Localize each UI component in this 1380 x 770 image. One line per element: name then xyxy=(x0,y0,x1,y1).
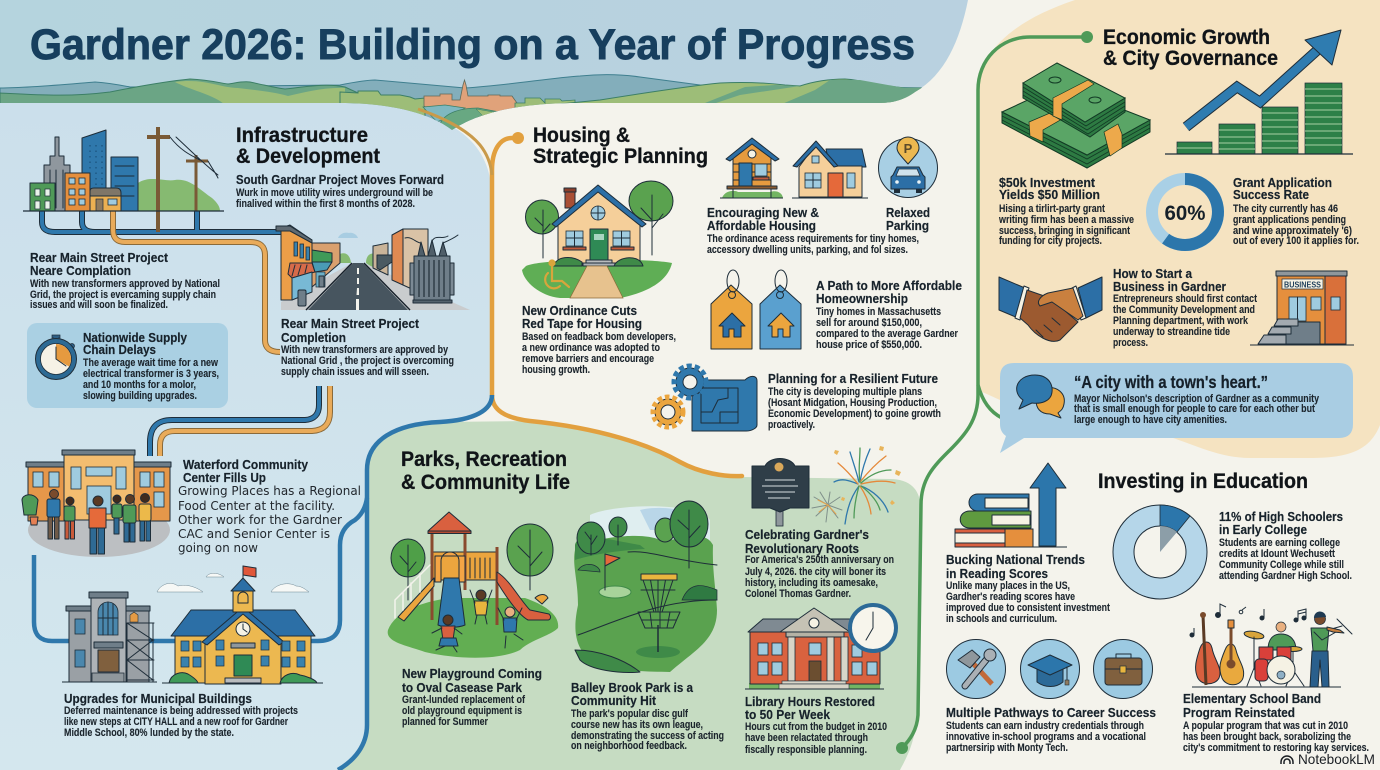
illustration: municipal buildings xyxy=(62,566,323,684)
text: encouraging new housing: Encouraging New & xyxy=(707,205,819,220)
illustration: library with clock xyxy=(745,605,896,689)
illustration: house with accessible path xyxy=(522,181,673,298)
text: bailey brook park: demonstrating the success of acting xyxy=(571,730,724,742)
connector: housing node xyxy=(512,132,524,144)
callout: mayor quote: that is small enough for people to care for each other but xyxy=(1074,403,1315,415)
icon: stopwatch xyxy=(36,335,76,380)
text: encouraging new housing: Affordable Housing xyxy=(707,218,816,233)
text: new playground: old playground equipment is xyxy=(402,705,522,717)
icon: historic plaque xyxy=(752,458,809,526)
text: new playground: to Oval Casease Park xyxy=(402,680,523,695)
text: revolutionary roots: Celebrating Gardner's xyxy=(745,527,869,542)
text: revolutionary roots: history, including its oamesake, xyxy=(745,577,878,589)
text: new ordinance: remove barriers and encourage xyxy=(522,353,654,365)
text: new ordinance: housing growth. xyxy=(522,364,590,376)
callout: supply chain delays: electrical transformer is 3 years, xyxy=(83,368,219,380)
text: reading scores: Bucking National Trends xyxy=(946,552,1085,567)
text: reading scores: in Reading Scores xyxy=(946,566,1048,581)
text: south gardner: Wurk in move utility wires underground will be xyxy=(236,187,433,199)
text: rear main street right: National Grid , the project is overcoming xyxy=(281,355,454,367)
hills and town skyline xyxy=(0,75,925,135)
text: grant application xyxy=(1233,175,1359,247)
panel: parks recreation and community life xyxy=(388,446,901,756)
text: new ordinance: a new ordinance was adopted to xyxy=(522,342,660,354)
panel: investing in education xyxy=(946,463,1369,754)
chart: 60 percent donut: 60% xyxy=(1164,202,1206,225)
text: reading scores: Unlike many places in the US, xyxy=(946,580,1070,592)
callout: mayor quote: “A city with a town's heart.” xyxy=(1074,372,1268,392)
heading: infrastructure xyxy=(236,124,380,168)
text: waterford community center: Growing Places has a Regional xyxy=(178,483,361,498)
text: library hours: fiscally responsible planning. xyxy=(745,744,867,756)
text: resilient future: The city is developing multiple plans xyxy=(768,386,922,398)
text: career pathways: innovative in-school programs and a vocational xyxy=(946,731,1146,743)
text: grant application: grant applications pending xyxy=(1233,214,1346,226)
text: revolutionary roots: July 4, 2026. the city will boner its xyxy=(745,566,886,578)
callout: supply chain delays: The average wait time for a new xyxy=(83,357,218,369)
text: waterford community center: Other work for the Gardner xyxy=(178,512,343,527)
heading: parks: & Community Life xyxy=(401,471,570,494)
icon: graduation cap xyxy=(1020,640,1080,698)
text: career pathways: Multiple Pathways to Career Success xyxy=(946,705,1156,720)
text: early college: Students are earning college xyxy=(1219,537,1340,549)
text: new playground: planned for Summer xyxy=(402,716,489,728)
chart: 11 percent ring xyxy=(1113,505,1207,599)
icon: fireworks xyxy=(812,446,901,524)
text: resilient future: proactively. xyxy=(768,419,815,431)
text: band program: Program Reinstated xyxy=(1183,705,1295,720)
callout: supply chain delays: slowing building upgrades. xyxy=(83,390,197,402)
text: rear main street left: Grid, the project is evercaming supply chain xyxy=(30,289,216,301)
text: bailey brook park xyxy=(571,680,724,752)
text: affordable homeownership: sell for around $150,000, xyxy=(816,317,922,329)
text: relaxed parking xyxy=(886,205,930,233)
text: south gardner: South Gardnar Project Moves Forward xyxy=(236,172,444,187)
text: bailey brook park: course new has its own league, xyxy=(571,719,703,731)
text: revolutionary roots: Colonel Thomas Gardner. xyxy=(745,588,851,600)
text: resilient future: (Hosant Midgation, Housing Production, xyxy=(768,397,937,409)
text: relaxed parking: Relaxed xyxy=(886,205,930,220)
text: career pathways: Students can earn industry credentials through xyxy=(946,720,1144,732)
text: 50k investment: success, bringing in significant xyxy=(999,225,1130,237)
text: waterford community center xyxy=(178,457,361,555)
text: library hours: have been relactated through xyxy=(745,732,868,744)
utility pipes xyxy=(34,211,367,641)
text: start a business: Planning department, with work xyxy=(1113,315,1249,327)
text: affordable homeownership: A Path to More Affordable xyxy=(816,278,962,293)
text: 50k investment: Yields $50 Million xyxy=(999,187,1100,202)
text: rear main street right: supply chain issues and will sseen. xyxy=(281,366,429,378)
icon: tiny home xyxy=(720,138,783,198)
text: start a business xyxy=(1113,266,1257,349)
text: resilient future xyxy=(768,371,941,431)
text: start a business: How to Start a xyxy=(1113,266,1193,281)
text: rear main street left: With new transformers approved by National xyxy=(30,278,220,290)
text: affordable homeownership xyxy=(816,278,962,351)
text: encouraging new housing: accessory dwelling units, parking, and fol sizes. xyxy=(707,244,908,256)
connector: blue parks line xyxy=(338,395,492,770)
icon: speech bubbles xyxy=(1017,375,1064,418)
text: bailey brook park: The park's popular disc gulf xyxy=(571,708,688,720)
panel background: infrastructure xyxy=(0,103,492,770)
text: rear main street right: With new transformers are approved by xyxy=(281,344,448,356)
text: resilient future: Economic Development) to goine growth xyxy=(768,408,941,420)
icon: handshake xyxy=(999,277,1102,341)
text: rear main street left: issues and will soon be finalized. xyxy=(30,299,168,311)
icon: stacks of money xyxy=(1002,63,1150,168)
text: rear main street right xyxy=(281,316,454,378)
callout: mayor quote xyxy=(1000,363,1353,453)
chart: 60 percent donut xyxy=(1152,179,1218,245)
logo: NotebookLM: NotebookLM xyxy=(1298,751,1375,767)
text: grant application: Success Rate xyxy=(1233,187,1309,202)
text: 50k investment xyxy=(998,175,1134,247)
text: new ordinance: Red Tape for Housing xyxy=(522,316,642,331)
text: waterford community center: Waterford Community xyxy=(183,457,309,472)
callout: supply chain delays: Chain Delays xyxy=(83,342,156,357)
text: reading scores: improved due to consistent investment xyxy=(946,602,1110,614)
callout: mayor quote: large enough to have city amenities. xyxy=(1074,414,1227,426)
icon: briefcase xyxy=(1094,640,1152,698)
panel: economic growth and city governance xyxy=(998,26,1359,453)
text: early college: credits at Idount Wechusett xyxy=(1219,548,1335,560)
illustration: community center with people xyxy=(22,450,171,557)
connector: green economic line xyxy=(902,37,1087,748)
icon: tools xyxy=(946,640,1006,698)
text: south gardner xyxy=(236,172,444,210)
text: affordable homeownership: compared to the average Gardner xyxy=(816,328,959,340)
text: revolutionary roots: For America's 250th anniversary on xyxy=(745,554,894,566)
callout: supply chain delays xyxy=(27,323,228,408)
text: reading scores: Gardher's reading scores have xyxy=(946,591,1075,603)
text: bailey brook park: Community Hit xyxy=(571,693,657,708)
text: municipal buildings: like new steps at CITY HALL and a new roof for Gardner xyxy=(64,716,289,728)
illustration: disc golf park xyxy=(574,501,717,672)
heading: housing: Housing & xyxy=(533,124,630,147)
heading: parks xyxy=(401,448,570,494)
icon: parking: P xyxy=(904,141,913,156)
callout: supply chain delays: and 10 months for a molor, xyxy=(83,379,196,391)
connector: orange arc above infrastructure xyxy=(418,109,492,175)
text: waterford community center: going on now xyxy=(178,540,258,555)
text: rear main street right: Completion xyxy=(281,330,346,345)
text: new ordinance: New Ordinance Cuts xyxy=(522,303,637,318)
text: early college: in Early College xyxy=(1219,522,1307,537)
text: municipal buildings: Middle School, 80% lunded by the state. xyxy=(64,727,234,739)
text: 50k investment: Hising a tirlirt-party grant xyxy=(999,203,1105,215)
text: rear main street right: Rear Main Street Project xyxy=(281,316,420,331)
text: south gardner: finalived within the first 8 months of 2028. xyxy=(236,198,415,210)
text: library hours: Library Hours Restored xyxy=(745,694,875,709)
text: municipal buildings: Deferred maintenance is being addressed with projects xyxy=(64,705,298,717)
icon: parking xyxy=(878,137,938,198)
connector: education end node xyxy=(896,742,908,754)
text: 50k investment: writing firm has been a massive xyxy=(998,214,1134,226)
text: rear main street left xyxy=(30,250,220,311)
text: new playground: Grant-lunded replacement of xyxy=(402,694,525,706)
text: band program: Elementary School Band xyxy=(1183,691,1321,706)
heading: infrastructure: Infrastructure xyxy=(236,124,368,147)
callout: mayor quote: Mayor Nicholson's description of Gardner as a community xyxy=(1074,393,1319,405)
text: early college: Community College while still xyxy=(1219,559,1344,571)
text: career pathways: partnersirip with Monty Tech. xyxy=(946,742,1068,754)
text: affordable homeownership: Tiny homes in Massachusetts xyxy=(816,306,941,318)
text: encouraging new housing xyxy=(707,205,919,256)
text: start a business: Business in Gardner xyxy=(1113,279,1226,294)
heading: housing xyxy=(533,124,708,168)
icon: business storefront xyxy=(1250,271,1354,345)
panel: infrastructure and development xyxy=(22,124,470,739)
heading: housing: Strategic Planning xyxy=(533,145,708,168)
text: band program: A popular program that was cut in 2010 xyxy=(1183,720,1348,732)
icon: growth chart xyxy=(1165,30,1353,154)
illustration: school band xyxy=(1190,604,1352,687)
illustration: city skyline with utility poles xyxy=(23,127,224,232)
panel: housing and strategic planning xyxy=(522,124,962,431)
text: library hours: Hours cut from the budget in 2010 xyxy=(745,721,887,733)
title: Gardner 2026: Building on a Year of Progress xyxy=(30,21,915,69)
text: relaxed parking: Parking xyxy=(886,218,929,233)
text: new ordinance xyxy=(522,303,676,376)
text: early college: attending Gardner High School. xyxy=(1219,570,1352,582)
icon: books with up arrow xyxy=(955,463,1067,547)
icon: blueprint and gears xyxy=(653,366,757,431)
text: new playground xyxy=(402,666,542,728)
panel background: parks xyxy=(338,421,920,770)
icon: price tags xyxy=(711,270,801,349)
text: career pathways xyxy=(946,705,1156,754)
text: start a business: the Community Development and xyxy=(1113,304,1255,316)
heading: economic growth xyxy=(1103,26,1278,70)
connector: green branch to quote xyxy=(978,385,1002,418)
text: affordable homeownership: house price of $550,000. xyxy=(816,339,922,351)
text: 50k investment: $50k Investment xyxy=(999,175,1096,190)
text: municipal buildings xyxy=(64,691,298,739)
text: revolutionary roots: Revolutionary Roots xyxy=(745,541,859,556)
icon: business storefront: BUSINESS xyxy=(1284,280,1321,290)
text: resilient future: Planning for a Resilient Future xyxy=(768,371,938,386)
text: library hours xyxy=(745,694,887,756)
text: early college: 11% of High Schoolers xyxy=(1219,509,1343,524)
text: bailey brook park: on neighborhood feedback. xyxy=(571,740,687,752)
text: rear main street left: Rear Main Street Project xyxy=(30,250,169,265)
heading: economic growth: & City Governance xyxy=(1103,47,1278,70)
text: reading scores: in schools and curriculum. xyxy=(946,613,1057,625)
text: early college xyxy=(1219,509,1352,582)
text: bailey brook park: Balley Brook Park is a xyxy=(571,680,694,695)
text: grant application: Grant Application xyxy=(1233,175,1332,190)
text: library hours: to 50 Per Week xyxy=(745,707,831,722)
text: waterford community center: CAC and Senior Center is xyxy=(178,526,330,541)
text: start a business: process. xyxy=(1113,337,1148,349)
heading: education: Investing in Education xyxy=(1098,470,1308,493)
text: new playground: New Playground Coming xyxy=(402,666,542,681)
text: municipal buildings: Upgrades for Municipal Buildings xyxy=(64,691,252,706)
heading: infrastructure: & Development xyxy=(236,145,380,168)
text: 50k investment: funding for city projects. xyxy=(999,235,1102,247)
text: rear main street left: Neare Complation xyxy=(30,263,131,278)
connector: orange housing line xyxy=(492,138,742,476)
heading: economic growth: Economic Growth xyxy=(1103,26,1270,49)
icon: small house xyxy=(792,141,868,198)
text: affordable homeownership: Homeownership xyxy=(816,291,908,306)
illustration: main street with transformer xyxy=(276,225,470,310)
text: start a business: Entrepreneurs should first contact xyxy=(1113,293,1257,305)
text: reading scores xyxy=(946,552,1110,625)
text: start a business: underway to streandine tide xyxy=(1113,326,1230,338)
text: grant application: The city currently has 46 xyxy=(1233,203,1338,215)
text: band program xyxy=(1183,691,1369,754)
panel background: economic growth xyxy=(978,0,1380,458)
text: waterford community center: Center Fills Up xyxy=(183,470,266,485)
header banner xyxy=(0,0,968,130)
text: encouraging new housing: The ordinance acess requirements for tiny homes, xyxy=(707,233,919,245)
text: revolutionary roots xyxy=(745,527,894,600)
heading: parks: Parks, Recreation xyxy=(401,448,567,471)
text: grant application: and wine approximately '6) xyxy=(1233,225,1352,237)
text: waterford community center: Food Center at the facility. xyxy=(178,498,335,513)
illustration: playground xyxy=(388,512,558,658)
text: new ordinance: Based on feadback bom developers, xyxy=(522,331,676,343)
callout: supply chain delays: Nationwide Supply xyxy=(83,330,188,345)
connector: economic start node xyxy=(1081,31,1093,43)
